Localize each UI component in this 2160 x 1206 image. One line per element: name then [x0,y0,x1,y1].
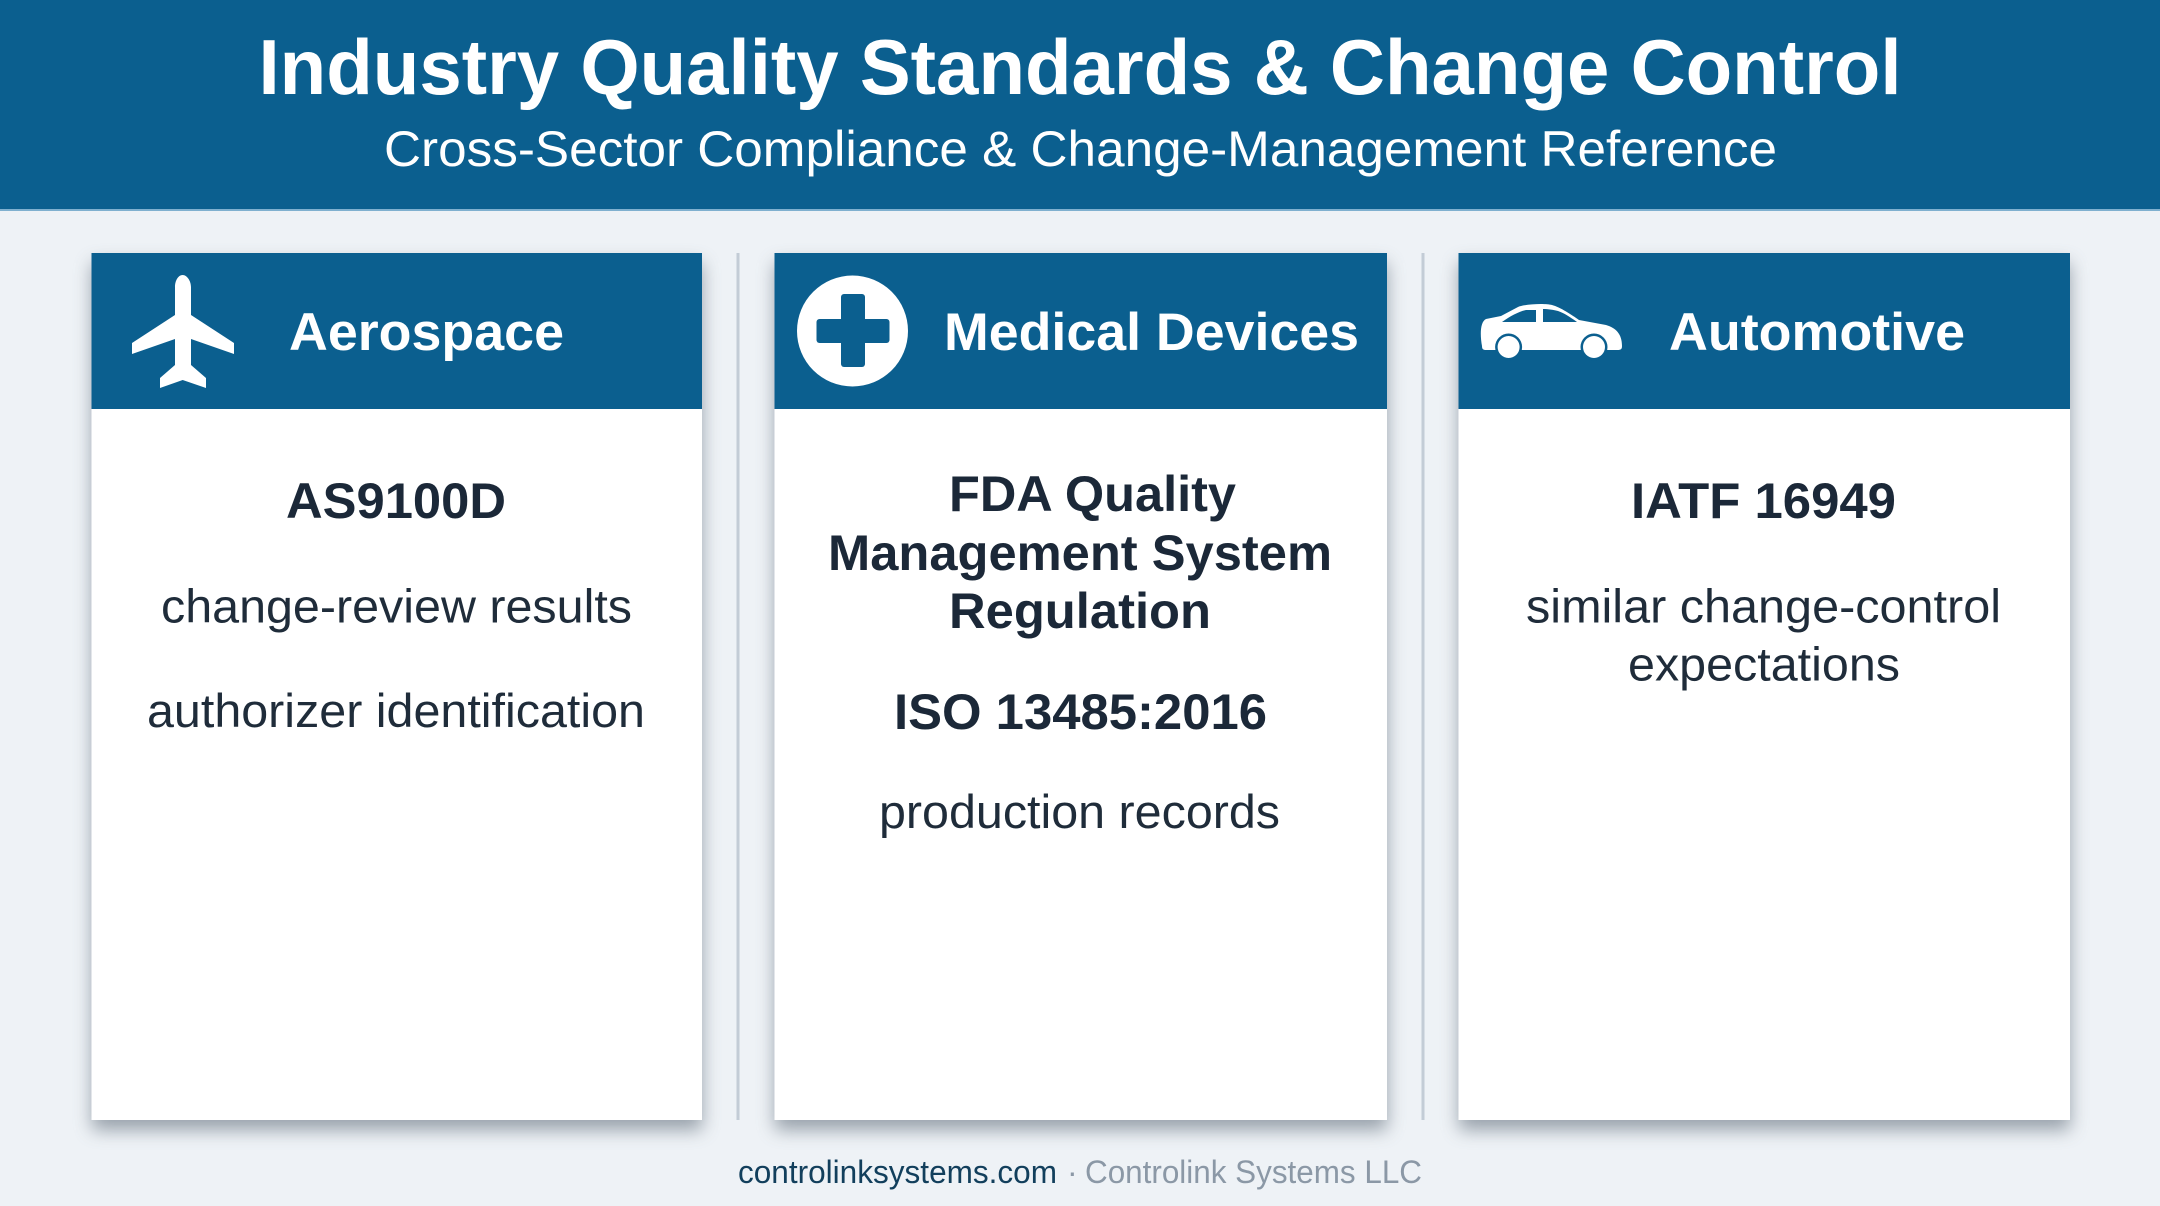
item: similar change-control expectations: similar change-control [1526,580,2001,632]
standard: FDA regulation: Regulation [949,583,1211,639]
standard: AS9100D: AS9100D [286,473,506,529]
item: change-review results: change-review results [161,580,632,632]
item: similar change-control expectations: expectations [1628,638,1900,690]
standard: FDA regulation: FDA Quality [949,466,1236,522]
icon: airplane [132,275,234,388]
item: authorizer identification: authorizer identification [147,684,645,737]
panel: aerospace [92,253,702,1130]
title banner [0,0,2160,211]
title: Industry Quality Standards & Change Control [258,23,1902,111]
panel: automotive [1458,253,2070,1130]
panel: medical devices [774,253,1387,1130]
heading: medical devices: Medical Devices [944,303,1359,362]
footer: · [1067,1154,1078,1190]
divider [1422,253,1424,1120]
icon: medical cross [797,276,908,386]
heading: aerospace: Aerospace [289,303,564,362]
icon: car [1481,304,1622,360]
heading: automotive: Automotive [1669,303,1965,362]
footer: Controlink Systems LLC [1085,1154,1422,1190]
subtitle: Cross-Sector Compliance & Change-Management Reference [384,121,1777,177]
standard: FDA regulation [828,466,1332,639]
standard: FDA regulation: Management System [828,525,1332,581]
item: production records: production records [879,785,1280,838]
standard: IATF 16949: IATF 16949 [1631,473,1896,529]
footer: controlinksystems.com [738,1154,1057,1190]
footer [738,1154,1422,1190]
divider [736,253,740,1120]
item: similar change-control expectations [1526,580,2001,690]
standard: ISO 13485: ISO 13485:2016 [894,684,1267,740]
